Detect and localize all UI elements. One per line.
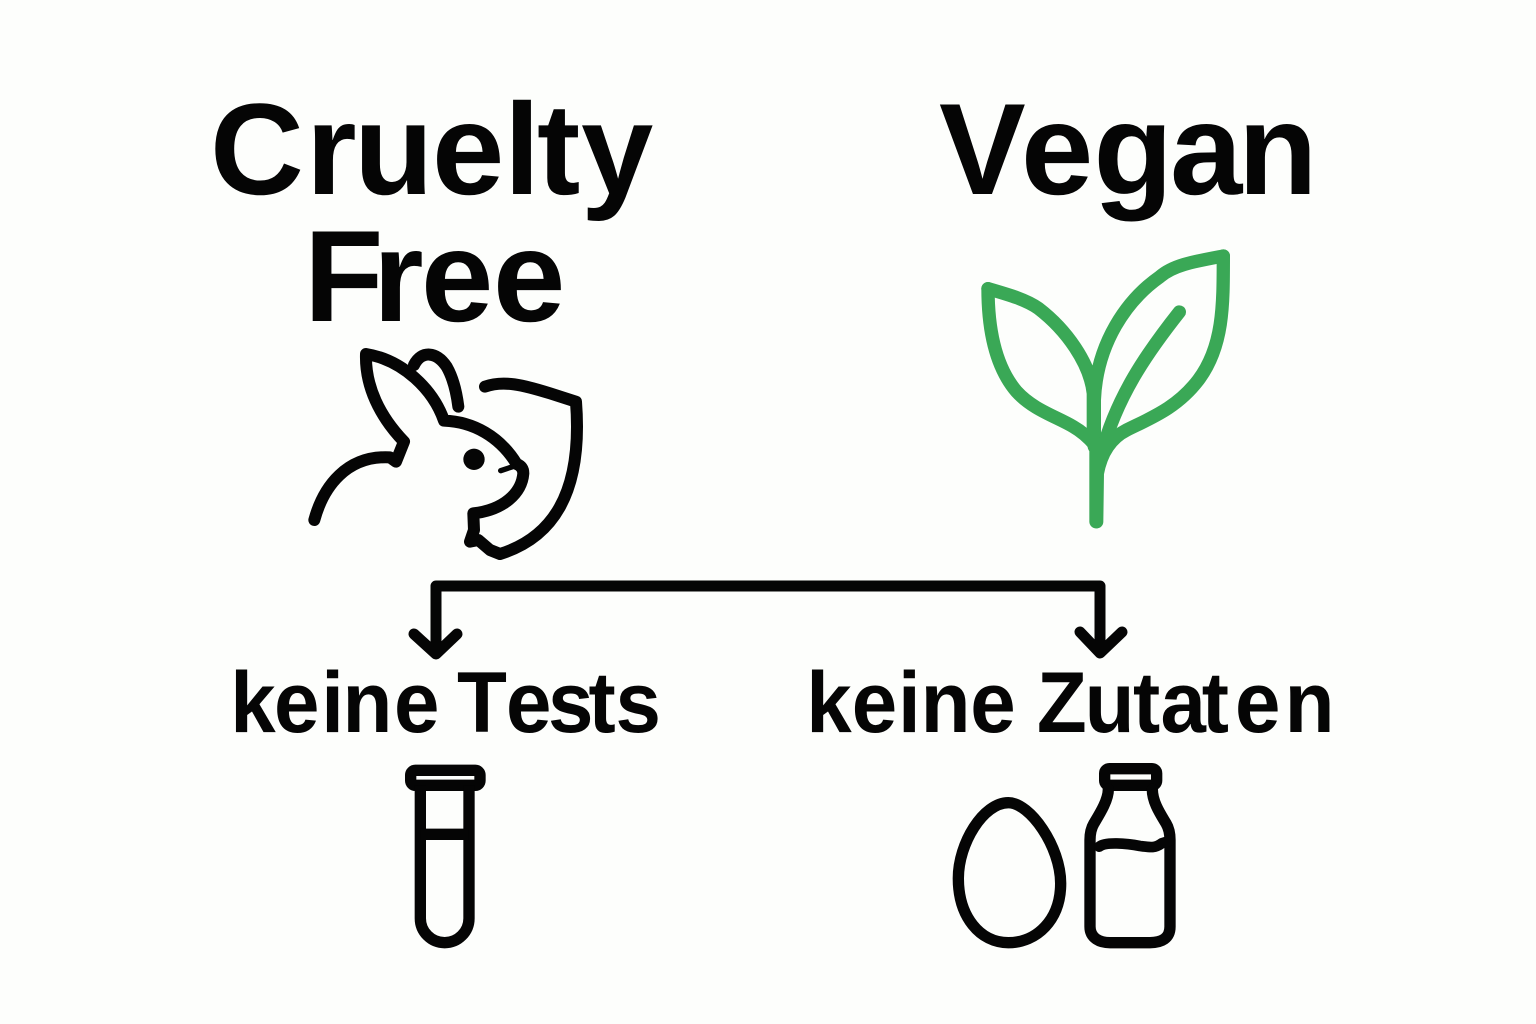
icon: rabbit with shield — [314, 354, 577, 554]
icon: egg — [958, 803, 1061, 943]
label: keine Tests: keine Tests — [230, 654, 661, 750]
heading: Cruelty Free: Cruelty — [210, 76, 653, 222]
icon: milk bottle — [1090, 769, 1170, 943]
arrow: split connector to both criteria — [414, 586, 1122, 654]
label: keine Zutaten: keine Zutaten — [806, 654, 1334, 750]
heading: Vegan: Vegan — [939, 76, 1317, 222]
heading: Cruelty Free: Free — [304, 203, 565, 349]
heading: Cruelty Free — [210, 76, 653, 349]
icon: test tube — [411, 770, 480, 943]
icon: green plant — [988, 256, 1223, 522]
